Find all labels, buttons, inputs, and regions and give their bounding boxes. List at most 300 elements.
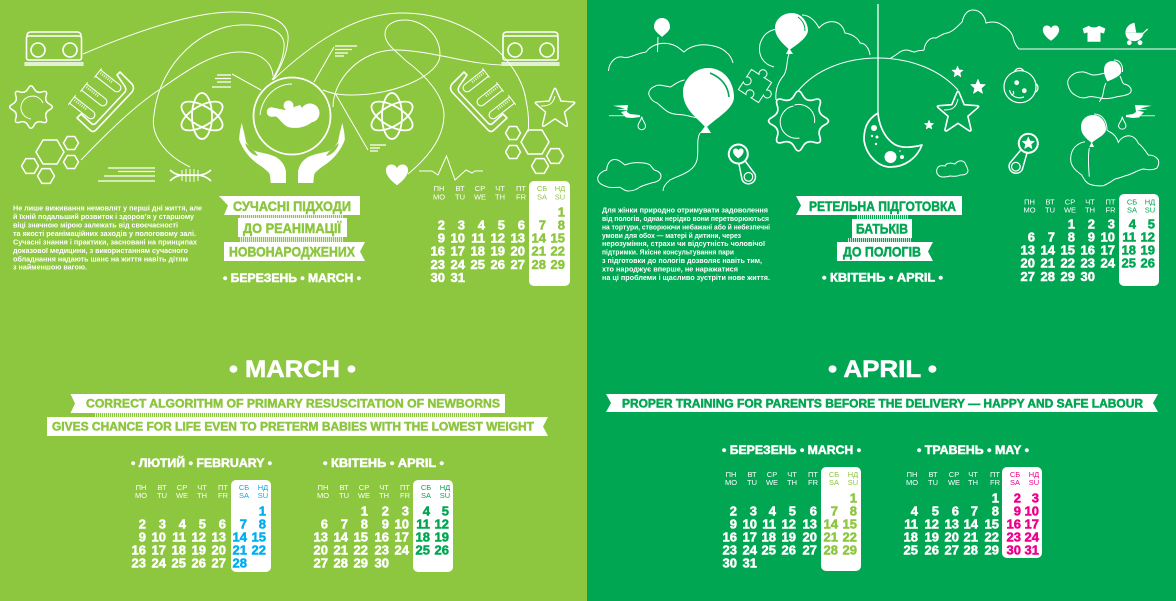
calendar: February: 16	[132, 542, 146, 558]
calendar: April top: 3	[1108, 216, 1115, 232]
calendar: April top: 24	[1101, 256, 1116, 270]
calendar: May: СБ	[1010, 470, 1020, 479]
calendar: April small: FR	[400, 491, 411, 500]
calendar: March top: 29	[551, 257, 565, 272]
calendar: March lower: 23	[723, 542, 737, 558]
icon: small stars	[924, 66, 986, 129]
calendar: April small: 29	[354, 556, 368, 570]
calendar: May: 11	[904, 516, 918, 532]
calendar: May: 3	[1032, 490, 1039, 506]
calendar: February: 23	[132, 556, 146, 570]
banner: March heading Ukrainian: СУЧАСНІ ПІДХОДИ	[233, 198, 351, 214]
calendar: April top: ПТ	[1106, 198, 1116, 206]
calendar: May: 13	[945, 516, 959, 532]
calendar: March lower: 31	[743, 556, 757, 570]
calendar: May: ЧТ	[968, 470, 978, 479]
calendar: April top: 15	[1061, 242, 1075, 258]
text block: left description: обладнання надають шанс на життя навіть дітям	[13, 254, 188, 264]
icon: heart top	[1043, 26, 1059, 41]
calendar: March top: TU	[455, 192, 465, 202]
calendar: March lower: 28	[824, 542, 838, 558]
calendar: May: 27	[945, 542, 959, 558]
calendar: April top: 5	[1148, 216, 1155, 232]
icon: text lines left	[212, 75, 231, 87]
illustration: newborn resuscitation network	[10, 12, 575, 185]
calendar: April small: 18	[416, 530, 430, 544]
calendar: March lower: 27	[803, 542, 817, 558]
calendar: March lower: 14	[824, 516, 839, 532]
calendar: April top: TH	[1085, 206, 1095, 214]
calendar: March top: 9	[438, 230, 445, 246]
icon: text lines bottom	[98, 168, 155, 181]
calendar: March lower: TU	[747, 478, 757, 487]
calendar: March top: 6	[518, 218, 525, 232]
calendar: March lower: 16	[723, 530, 737, 544]
heading: March month label: • БЕРЕЗЕНЬ • MARCH •	[223, 271, 361, 285]
calendar: March lower: 1	[850, 490, 857, 506]
calendar: February: 11	[172, 530, 186, 544]
heading: March English: • MARCH •	[229, 356, 356, 383]
icon: right small balloon	[1099, 60, 1123, 102]
banner: March English slogan	[47, 394, 548, 436]
calendar: May: 21	[964, 530, 978, 544]
calendar: May: ПН	[907, 470, 917, 479]
calendar: March top: ПТ	[516, 184, 526, 193]
calendar: May: 6	[952, 504, 959, 518]
calendar: February: 15	[252, 530, 266, 544]
calendar: April small: 19	[435, 530, 449, 544]
icon: right stork	[1118, 105, 1155, 129]
calendar: March top: 15	[551, 230, 565, 246]
calendar: May: FR	[990, 478, 1001, 487]
calendar: April small: 11	[416, 516, 430, 532]
calendar: April top: ЧТ	[1085, 198, 1095, 206]
mobile arc	[798, 58, 958, 91]
calendar: March lower: 6	[810, 504, 817, 518]
calendar: March lower	[723, 467, 861, 571]
icon: left stork	[609, 105, 646, 130]
calendar: April top: 1	[1068, 216, 1075, 232]
calendar: May: 24	[1025, 530, 1040, 544]
calendar: March top: 20	[511, 244, 525, 258]
calendar: February: ВТ	[157, 483, 167, 492]
calendar: March top: 2	[438, 218, 445, 232]
calendar: February: 3	[159, 516, 166, 532]
calendar: March lower: 15	[843, 516, 857, 532]
calendar: April small: 28	[334, 556, 348, 570]
calendar: February: 21	[233, 542, 247, 558]
calendar: March top: 28	[532, 257, 546, 272]
icon: right test tube rack	[450, 69, 515, 132]
icon: text lines upper right	[335, 46, 357, 56]
calendar: April top: 11	[1122, 230, 1136, 244]
icon: gear left	[10, 86, 52, 128]
calendar: March lower: 4	[769, 504, 777, 518]
calendar: May: 30	[1007, 542, 1021, 558]
calendar: February: 7	[240, 516, 247, 532]
calendar: April small: 16	[375, 530, 389, 544]
calendar: May: 26	[925, 542, 939, 558]
calendar: March top: TH	[495, 192, 505, 202]
heading: February month label: • ЛЮТИЙ • FEBRUARY •	[131, 455, 272, 470]
heading: April month label small: • КВІТЕНЬ • APRIL •	[323, 456, 444, 470]
icon: puzzle piece	[738, 64, 781, 106]
calendar: February: 26	[192, 556, 206, 570]
icon: text lines lower	[370, 145, 386, 151]
calendar: April top: 19	[1141, 242, 1155, 258]
calendar: May: 4	[911, 504, 919, 518]
calendar: March top: 19	[491, 244, 505, 258]
calendar: March lower: ПН	[726, 470, 736, 479]
calendar: May: WE	[948, 478, 960, 487]
calendar: April small: 12	[435, 516, 449, 532]
panel: left green background	[0, 0, 587, 601]
calendar: April small: WE	[358, 491, 370, 500]
calendar: March lower: 7	[831, 504, 838, 518]
calendar: April top: 30	[1081, 269, 1095, 284]
calendar: March top: 30	[431, 270, 445, 285]
calendar: March top: ВТ	[455, 184, 465, 193]
calendar: May: 16	[1007, 516, 1021, 532]
calendar: April small: 10	[395, 516, 409, 532]
calendar: February: FR	[218, 491, 229, 500]
calendar: May: 5	[932, 504, 939, 518]
calendar: April top: 18	[1122, 242, 1136, 258]
calendar: March lower: 21	[824, 530, 838, 544]
calendar: May: ВТ	[928, 470, 938, 479]
icon: circle with baby	[254, 78, 330, 154]
calendar: February: ЧТ	[197, 483, 207, 492]
calendar: February: 1	[259, 504, 266, 518]
calendar: March lower: 19	[782, 530, 796, 544]
calendar: April top: MO	[1023, 206, 1036, 214]
calendar: March lower: 18	[762, 530, 776, 544]
banner: March heading Ukrainian: ДО РЕАНІМАЦІЇ	[243, 220, 342, 236]
icon: gear sun	[769, 91, 828, 151]
calendar: March lower: SU	[848, 478, 858, 487]
calendar: February: ПТ	[218, 483, 228, 492]
calendar: April small: 3	[402, 504, 409, 518]
calendar: February: 9	[139, 530, 146, 544]
text block: right description: підтримки. Якісне консультування пари	[602, 248, 734, 256]
calendar: April top: 9	[1088, 230, 1095, 244]
mobile vertical line	[877, 4, 879, 113]
calendar: May: 23	[1007, 530, 1021, 544]
calendar: April top: 21	[1041, 256, 1055, 270]
banner: March English slogan: GIVES CHANCE FOR LIFE EVEN TO PRETERM BABIES WITH THE LOWEST WEIGHT	[52, 420, 535, 434]
calendar: April top: 7	[1048, 230, 1055, 244]
calendar: April top: СР	[1065, 198, 1075, 206]
calendar: March lower: 20	[803, 530, 817, 544]
connecting curves	[81, 12, 529, 174]
calendar: March lower: 11	[762, 516, 776, 532]
icon: teddy face	[1004, 68, 1038, 103]
calendar: March lower: СР	[767, 470, 777, 479]
calendar: February: TU	[157, 491, 167, 500]
calendar: April small: 24	[395, 542, 410, 558]
calendar: April top: 17	[1101, 242, 1115, 258]
calendar: April small: 26	[435, 542, 449, 558]
calendar: April small: 22	[354, 542, 368, 558]
calendar: March lower: НД	[848, 470, 858, 479]
calendar: April top: 4	[1129, 216, 1137, 232]
calendar: February: 17	[152, 542, 166, 558]
icon: small top balloon	[654, 18, 670, 52]
calendar: February: 19	[192, 542, 206, 558]
calendar: April small: ЧТ	[379, 483, 389, 492]
calendar: April small: 15	[354, 530, 368, 544]
calendar: February: 25	[172, 556, 186, 570]
calendar: February: WE	[176, 491, 188, 500]
text block: right description	[602, 206, 770, 282]
calendar: March lower: ВТ	[747, 470, 757, 479]
calendar: May: 7	[971, 504, 978, 518]
calendar: April small: 1	[361, 504, 368, 518]
calendar: May: 15	[985, 516, 999, 532]
calendar: May: 1	[992, 490, 999, 506]
text block: left description: та якості реанімаційних заходів у пологовому залі.	[13, 229, 196, 238]
calendar: February: 8	[259, 516, 266, 532]
calendar: March lower: 8	[850, 504, 857, 518]
calendar: April small: TU	[339, 491, 349, 500]
calendar: April small: 2	[382, 504, 389, 518]
calendar: May: 25	[904, 542, 918, 558]
calendar: April small: 23	[375, 542, 389, 558]
calendar: April small: ПН	[318, 483, 328, 492]
calendar: February: SU	[258, 491, 268, 500]
heading: April English: • APRIL •	[828, 356, 937, 383]
calendar: March top: ПН	[434, 184, 444, 193]
calendar: March lower: 5	[789, 504, 796, 518]
calendar: March top: 31	[451, 270, 465, 285]
banner: March English slogan: CORRECT ALGORITHM OF PRIMARY RESUSCITATION OF NEWBORNS	[86, 396, 500, 410]
calendar: February: MO	[135, 491, 147, 500]
calendar: March top	[431, 181, 570, 286]
calendar: May: ПТ	[990, 470, 1000, 479]
banner: April heading Ukrainian: РЕТЕЛЬНА ПІДГОТОВКА	[809, 198, 956, 214]
calendar: April small: 30	[375, 556, 389, 570]
calendar: April small: 4	[423, 504, 431, 518]
calendar: May: TU	[928, 478, 938, 487]
calendar: April top: WE	[1064, 206, 1076, 214]
icon: right machine	[502, 32, 559, 65]
text block: left description: Сучасні знання і практики, засновані на принципах	[13, 238, 197, 246]
calendar: March top: 4	[478, 218, 486, 232]
text block: right description: умови для обох — матері й дитини, через	[602, 231, 741, 240]
calendar: March top: 14	[532, 230, 547, 246]
calendar: April top: 13	[1021, 242, 1035, 258]
calendar: May: 20	[945, 530, 959, 544]
calendar: April top: 6	[1028, 230, 1035, 244]
calendar: April small: 21	[334, 542, 348, 558]
calendar: March top: 18	[471, 244, 485, 258]
calendar: February: TH	[197, 491, 207, 500]
calendar: March top: 23	[431, 257, 445, 272]
calendar: April small: 20	[314, 542, 328, 558]
calendar: February: 22	[252, 542, 266, 558]
calendar: May: 12	[925, 516, 939, 532]
calendar: February: 10	[152, 530, 166, 544]
calendar: February: SA	[239, 491, 249, 500]
calendar: March top: SU	[555, 192, 565, 202]
banner: March heading Ukrainian	[219, 196, 365, 261]
calendar: March top: 13	[511, 230, 525, 246]
calendar: March top: 3	[458, 218, 465, 232]
calendar: March lower: WE	[766, 478, 778, 487]
icon: left test tube rack	[69, 69, 134, 132]
calendar: April small: СБ	[421, 483, 431, 492]
text block: left description: віці значною мірою залежать від своєчасності	[13, 220, 178, 230]
icon: left machine	[25, 32, 83, 65]
calendar: March lower: TH	[787, 478, 797, 487]
calendar: March lower: 13	[803, 516, 817, 532]
calendar: March lower: 17	[743, 530, 757, 544]
calendar: May: 14	[964, 516, 979, 532]
icon: stroller	[1126, 24, 1148, 44]
calendar: April top: 8	[1068, 230, 1075, 244]
calendar: March top: НД	[555, 184, 565, 193]
icon: t-shirt	[1083, 26, 1105, 42]
calendar: April small: SA	[421, 491, 431, 500]
calendar: April top: ПН	[1024, 198, 1035, 206]
calendar: April small: 6	[321, 516, 328, 532]
calendar: March top: СР	[475, 184, 485, 193]
calendar: April small: MO	[317, 491, 329, 500]
calendar: April top: ВТ	[1045, 198, 1055, 206]
icon: DNA helix	[170, 169, 211, 182]
icon: balloon upper centre	[775, 13, 808, 100]
calendar: May: SA	[1010, 478, 1020, 487]
calendar: May: 22	[985, 530, 999, 544]
icon: star	[535, 88, 575, 126]
calendar: May: 31	[1025, 542, 1039, 558]
calendar: May: СР	[949, 470, 959, 479]
calendar: March top: SA	[537, 192, 547, 202]
calendar: April top: SA	[1127, 206, 1137, 214]
calendar: February: 18	[172, 542, 186, 558]
calendar: February: 24	[152, 556, 167, 570]
calendar: April small: ВТ	[339, 483, 349, 492]
icon: heartbeat line	[419, 156, 483, 180]
illustration: baby and parents mobile	[598, 4, 1176, 191]
calendar: April top: 2	[1088, 216, 1095, 232]
calendar: April top: 22	[1061, 256, 1075, 270]
calendar: May: TH	[968, 478, 978, 487]
text block: left description: доказової медицини, з використанням сучасного	[13, 246, 189, 255]
calendar: March lower: 9	[730, 516, 737, 532]
calendar: May: 17	[1025, 516, 1039, 532]
calendar: May: 29	[985, 542, 999, 558]
text block: left description: з найменшою вагою.	[13, 262, 87, 272]
calendar: March top: 27	[511, 257, 525, 272]
calendar: April top: 12	[1141, 230, 1155, 244]
calendar: April small: 25	[416, 542, 430, 558]
calendar: March lower: SA	[829, 478, 839, 487]
calendar: March top: 17	[451, 244, 465, 258]
calendar: April top: TU	[1045, 206, 1055, 214]
calendar: May: MO	[906, 478, 918, 487]
text block: right description: з підготовки до пологів дозволяє навіть тим,	[602, 256, 762, 265]
calendar: March top: 8	[558, 218, 565, 232]
calendar: March top: 10	[451, 230, 465, 246]
calendar: March lower: 30	[723, 556, 737, 570]
banner: April English slogan: PROPER TRAINING FOR PARENTS BEFORE THE DELIVERY — HAPPY AND SAFE LABOUR	[622, 396, 1143, 410]
icon: left rattle	[726, 141, 760, 187]
calendar: April top	[1021, 194, 1159, 286]
calendar: April top: 27	[1021, 269, 1035, 284]
icon: right hand	[298, 123, 345, 183]
calendar: April top: 16	[1081, 242, 1095, 258]
icon: heart	[386, 164, 408, 185]
calendar: March lower: 22	[843, 530, 857, 544]
calendar: March top: 12	[491, 230, 505, 246]
calendar: February: СБ	[239, 483, 249, 492]
calendar: April top: SU	[1145, 206, 1155, 214]
calendar: April top: 23	[1081, 256, 1095, 270]
text block: right description: на тортури, створюючи небажані або й небезпечні	[602, 222, 770, 232]
calendar: April small: 13	[314, 530, 328, 544]
text block: right description: Для жінки природно отримувати задоволення	[602, 206, 768, 214]
calendar: May: 8	[992, 504, 999, 518]
calendar: May	[904, 467, 1042, 558]
calendar: March top: 1	[558, 204, 565, 220]
text block: right description: нерозуміння, страхи чи відсутність чоловічої	[602, 239, 766, 248]
calendar: February	[132, 480, 271, 572]
text block: left description: Не лише виживання немовлят у перші дні життя, але	[13, 204, 202, 212]
calendar: March lower: MO	[725, 478, 737, 487]
calendar: March top: ЧТ	[495, 184, 505, 193]
calendar: May: 19	[925, 530, 939, 544]
calendar: April top: 14	[1041, 242, 1056, 258]
text block: right description: від пологів, однак нерідко вони перетворюються	[602, 214, 769, 223]
heading: May month label: • ТРАВЕНЬ • MAY •	[917, 443, 1029, 457]
calendar: April small: SU	[440, 491, 450, 500]
calendar: February: 5	[199, 516, 206, 532]
calendar: March top: FR	[516, 192, 527, 202]
icon: right rattle	[1004, 130, 1041, 177]
calendar: March top: СБ	[537, 184, 547, 193]
calendar: April top: FR	[1106, 206, 1116, 214]
calendar: February: 2	[139, 516, 146, 532]
calendar: May: 10	[1025, 504, 1039, 518]
calendar: April top: НД	[1145, 198, 1155, 206]
calendar: March lower: 25	[762, 542, 776, 558]
calendar: April top: 10	[1101, 230, 1115, 244]
icon: hanging star	[937, 91, 979, 131]
calendar: May: НД	[1029, 470, 1039, 479]
calendar: March lower: 24	[743, 542, 758, 558]
icon: left hand	[239, 123, 286, 183]
icon: big balloon	[663, 68, 734, 191]
calendar: March top: 25	[471, 257, 485, 272]
calendar: March lower: 12	[782, 516, 796, 532]
text block: right description: на ці проблеми і щасливо зустріти нове життя.	[602, 273, 770, 282]
calendar: March top: 22	[551, 244, 565, 258]
calendar: February: 12	[192, 530, 206, 544]
heading: April month label: • КВІТЕНЬ • APRIL •	[822, 270, 943, 284]
calendar: March top: MO	[433, 192, 445, 202]
calendar: April small: 7	[341, 516, 348, 532]
banner: April heading Ukrainian: ДО ПОЛОГІВ	[843, 244, 921, 260]
calendar: April top: 25	[1122, 256, 1136, 270]
calendar: April small: ПТ	[400, 483, 410, 492]
calendar: March top: 7	[539, 218, 546, 232]
calendar: May: 2	[1014, 490, 1021, 506]
calendar: March top: 11	[471, 230, 485, 246]
text block: right description: хто народжує вперше, не наражатися	[602, 264, 738, 274]
clouds	[598, 10, 1176, 191]
heading: March month label lower: • БЕРЕЗЕНЬ • MARCH •	[722, 443, 861, 457]
